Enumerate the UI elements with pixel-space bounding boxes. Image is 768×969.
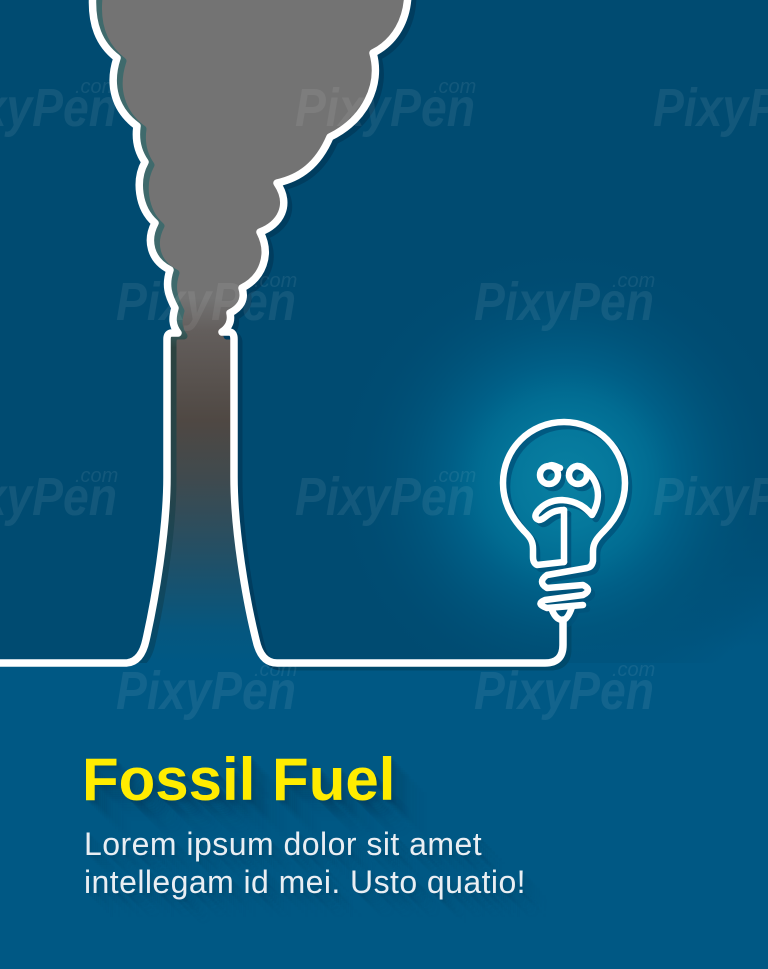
filament stem — [561, 510, 567, 562]
watermark row 4: PixyPen — [116, 661, 296, 721]
watermark row 1 — [0, 76, 768, 138]
watermarks — [0, 76, 768, 721]
smoke and chimney fill — [92, 0, 408, 663]
watermark row 4: .com — [612, 659, 655, 681]
upper background panel — [0, 0, 563, 663]
left eye — [540, 466, 558, 484]
watermark row 4: PixyPen — [474, 661, 654, 721]
outline drop shadow — [227, 0, 568, 667]
watermark row 1: PixyPen — [295, 78, 475, 138]
bulb shadow — [507, 426, 629, 624]
watermark row 2: .com — [612, 270, 655, 292]
watermark row 4 — [116, 659, 655, 721]
title: Fossil Fuel — [82, 746, 395, 813]
watermark row 2: PixyPen — [474, 272, 654, 332]
body text line 2: intellegam id mei. Usto quatio! — [84, 864, 526, 900]
bulb tip — [552, 607, 572, 620]
bulb glass and screw thread — [503, 422, 625, 608]
right eye — [569, 466, 587, 484]
body text line 1: Lorem ipsum dolor sit amet — [84, 826, 482, 862]
light bulb glow — [320, 235, 768, 663]
icon: light bulb with sad face — [503, 422, 625, 620]
watermark row 2 — [116, 270, 655, 332]
upper background panel right of the cord — [563, 0, 768, 663]
watermark row 3: PixyPen — [295, 467, 475, 527]
watermark row 3: .com — [75, 465, 118, 487]
chimney and smoke outline — [0, 0, 563, 663]
watermark row 2: .com — [254, 270, 297, 292]
illustration: chimney, smoke and light bulb — [0, 0, 768, 720]
watermark row 3 — [0, 465, 768, 527]
watermark row 2: PixyPen — [116, 272, 296, 332]
frown mouth and brow — [535, 465, 598, 520]
watermark row 4: .com — [254, 659, 297, 681]
smoke inner shadow — [98, 0, 184, 666]
watermark row 1: .com — [75, 76, 118, 98]
watermark row 3: .com — [433, 465, 476, 487]
watermark row 1: .com — [433, 76, 476, 98]
